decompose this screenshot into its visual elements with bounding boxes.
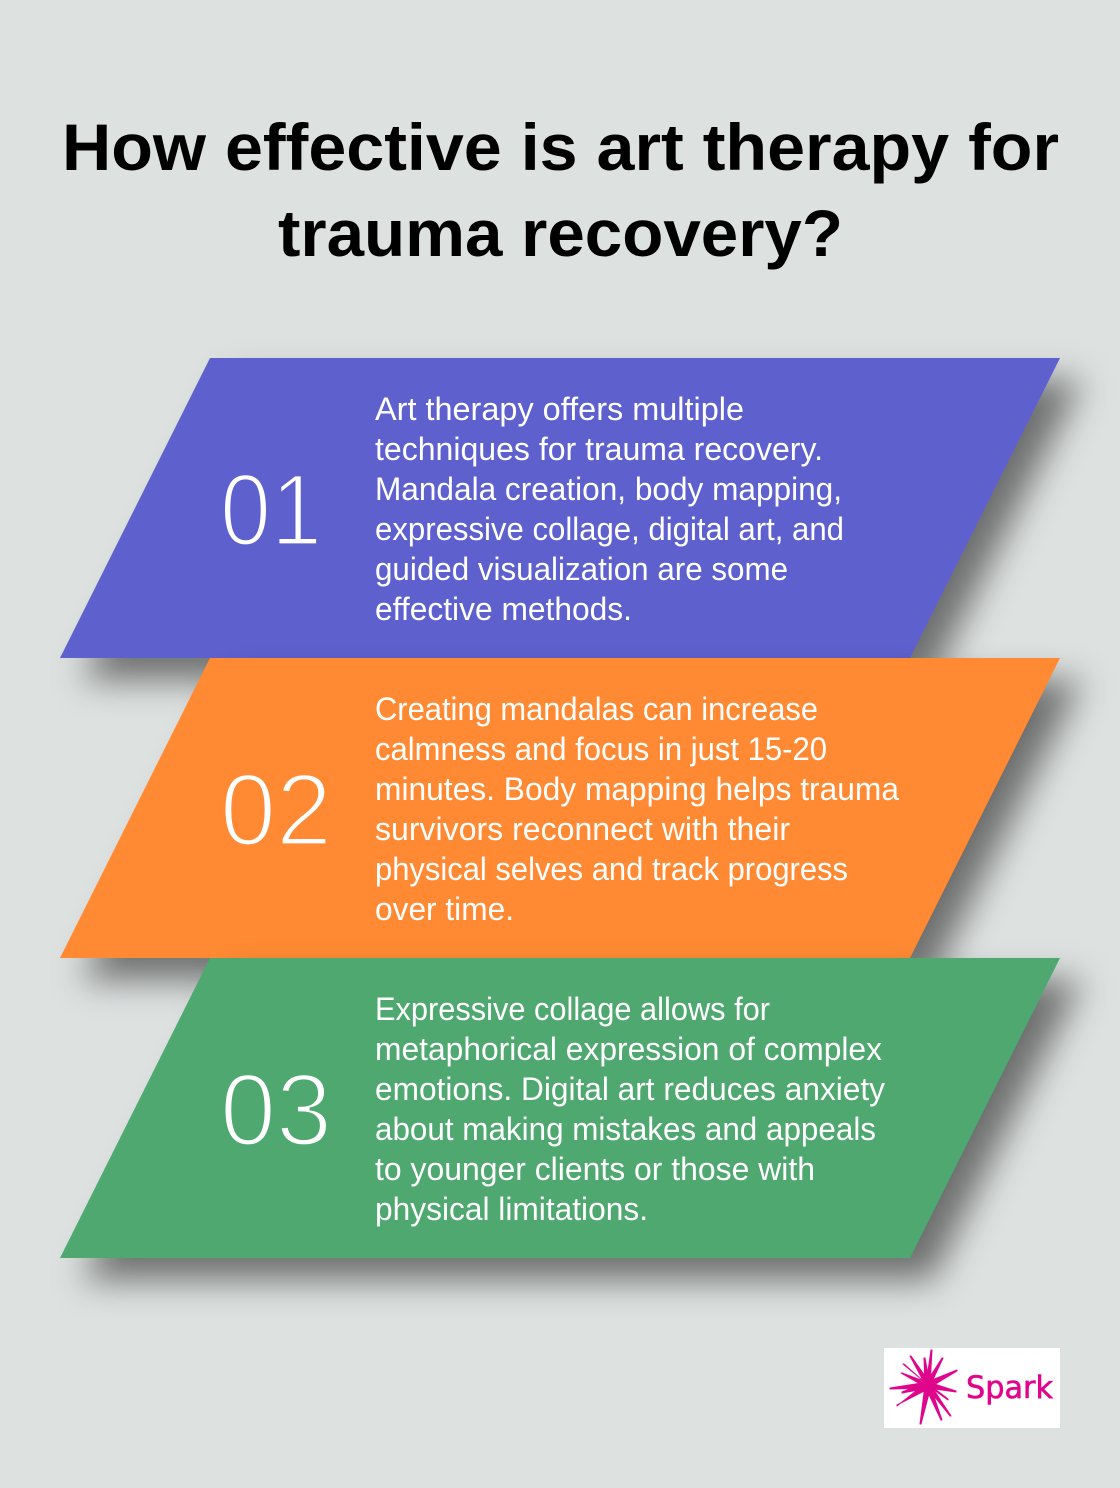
text: step 1 description: effective methods. (375, 591, 632, 627)
text: step 1 description: Art therapy offers multiple (375, 391, 744, 427)
text: step 2 description: Creating mandalas can increase (375, 691, 818, 727)
text: step 3 description: emotions. Digital art reduces anxiety (375, 1071, 885, 1107)
title: How effective is art therapy for (62, 110, 1059, 184)
number: 01: 01 (220, 453, 322, 567)
icon: spark starburst (890, 1350, 957, 1424)
shadow: step 3 (82, 980, 1082, 1280)
text: step 2 description: physical selves and track progress (375, 851, 848, 887)
number: 03: 03 (220, 1053, 332, 1167)
text: step 1 description: Mandala creation, body mapping, (375, 471, 842, 507)
text: step 3 description: about making mistakes and appeals (375, 1111, 876, 1147)
logo background (884, 1348, 1060, 1428)
text: step 3 description: physical limitations. (375, 1191, 648, 1227)
text: step 2 description: over time. (375, 891, 514, 927)
text: step 2 description: minutes. Body mapping helps trauma (375, 771, 899, 807)
shadow: step 2 (82, 680, 1082, 980)
number: 02: 02 (220, 753, 332, 867)
panel: step 3 (60, 958, 1082, 1280)
shape: step 3 parallelogram (60, 958, 1060, 1258)
logo: Spark (884, 1348, 1060, 1428)
title: trauma recovery? (278, 196, 843, 270)
text: step 1 description (375, 391, 844, 627)
shape: step 1 parallelogram (60, 358, 1060, 658)
text: step 2 description: calmness and focus in just 15-20 (375, 731, 827, 767)
logo wordmark: Spark (966, 1370, 1053, 1406)
text: step 2 description (375, 691, 899, 927)
text: step 1 description: techniques for trauma recovery. (375, 431, 823, 467)
text: step 3 description: to younger clients or those with (375, 1151, 815, 1187)
text: step 2 description: survivors reconnect with their (375, 811, 790, 847)
text: step 1 description: guided visualization are some (375, 551, 788, 587)
panel: step 1 (60, 358, 1082, 680)
title (62, 110, 1059, 270)
panel: step 2 (60, 658, 1082, 980)
text: step 1 description: expressive collage, digital art, and (375, 511, 844, 547)
shadow: step 1 (82, 380, 1082, 680)
text: step 3 description (375, 991, 885, 1227)
text: step 3 description: metaphorical expression of complex (375, 1031, 882, 1067)
text: step 3 description: Expressive collage allows for (375, 991, 770, 1027)
shape: step 2 parallelogram (60, 658, 1060, 958)
